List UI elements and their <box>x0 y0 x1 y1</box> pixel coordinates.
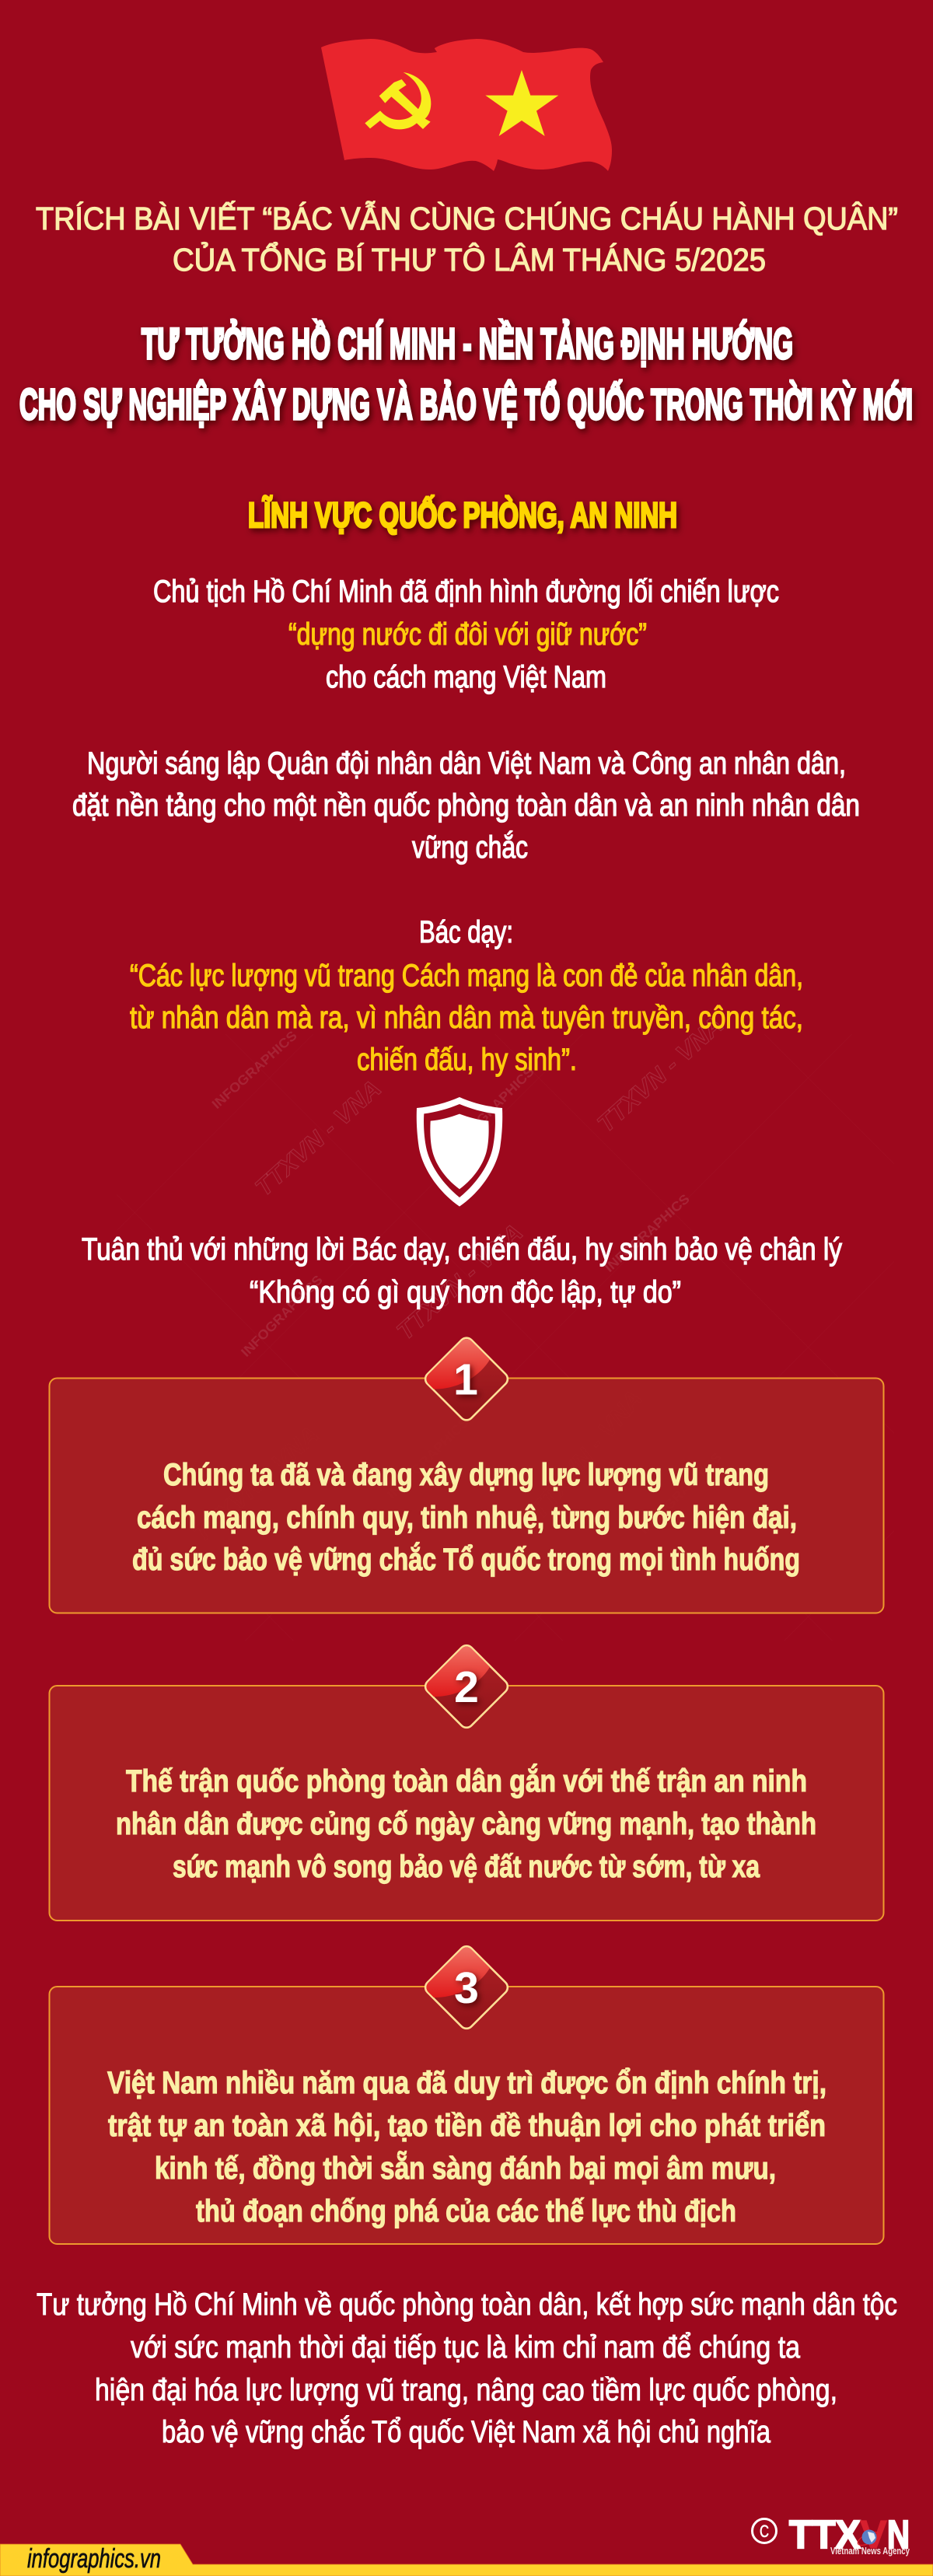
watermarks: TTXVN - VNA <box>525 1385 648 1524</box>
panel text 2: Thế trận quốc phòng toàn dân gắn với thế trận an ninh <box>126 1763 807 1798</box>
badge 2: 2 <box>454 1662 479 1712</box>
badge 1 <box>412 1325 511 1423</box>
title <box>19 319 913 428</box>
footer site name: infographics.vn <box>27 2544 161 2574</box>
text block: quote: Bác dạy: <box>419 915 513 949</box>
watermarks: TTXVN - VNA <box>187 1421 324 1547</box>
watermarks: INFOGRAPHICS <box>384 1414 472 1502</box>
footer band <box>0 2544 933 2576</box>
watermarks: TTXVN - VNA <box>592 1011 729 1138</box>
text block: strategic line: cho cách mạng Việt Nam <box>326 660 606 694</box>
panel text 3: kinh tế, đồng thời sẵn sàng đánh bại mọi âm mưu, <box>155 2150 776 2186</box>
text block: quote <box>130 915 803 1077</box>
watermarks: INFOGRAPHICS <box>449 1064 537 1152</box>
subtitle <box>36 201 898 278</box>
icon: shield <box>417 1097 502 1207</box>
text block: quote: chiến đấu, hy sinh”. <box>357 1043 577 1077</box>
panel text 3: thủ đoạn chống phá của các thế lực thù địch <box>196 2194 736 2228</box>
panel: point 2 <box>50 1632 883 1921</box>
badge 2 <box>412 1632 511 1731</box>
watermarks: INFOGRAPHICS <box>637 1449 725 1537</box>
subtitle: CỦA TỔNG BÍ THƯ TÔ LÂM THÁNG 5/2025 <box>173 241 766 278</box>
text block: founder <box>72 746 860 865</box>
watermarks: INFOGRAPHICS <box>238 1272 326 1360</box>
text block: strategic line: “dựng nước đi đôi với giữ nước” <box>288 617 647 652</box>
text block: quote: từ nhân dân mà ra, vì nhân dân mà tuyên truyền, công tác, <box>130 1001 803 1035</box>
text block: conclusion: bảo vệ vững chắc Tổ quốc Việt Nam xã hội chủ nghĩa <box>162 2414 771 2449</box>
panel text 2 <box>116 1763 816 1884</box>
copyright mark <box>753 2519 776 2543</box>
icon: hammer and sickle <box>365 72 431 129</box>
text block: conclusion: với sức mạnh thời đại tiếp tục là kim chỉ nam để chúng ta <box>131 2330 801 2365</box>
watermarks: INFOGRAPHICS <box>209 1028 300 1112</box>
panel: point 3 <box>50 1933 883 2244</box>
logo: TTXVN: TTX <box>789 2512 861 2557</box>
icon: party and national flag <box>321 39 612 171</box>
text block: oath <box>82 1232 842 1309</box>
panel text 1: cách mạng, chính quy, tinh nhuệ, từng bước hiện đại, <box>137 1501 797 1535</box>
text block: founder: vững chắc <box>412 830 528 865</box>
logo: TTXVN: V <box>860 2512 887 2557</box>
logo: TTXVN <box>753 2512 910 2557</box>
panel: point 1 <box>50 1325 883 1613</box>
section heading: LĨNH VỰC QUỐC PHÒNG, AN NINH <box>248 495 677 535</box>
panel text 3 <box>107 2066 826 2228</box>
panel text 1: Chúng ta đã và đang xây dựng lực lượng vũ trang <box>163 1458 769 1492</box>
copyright mark: C <box>760 2522 769 2541</box>
logo: TTXVN: N <box>887 2512 910 2557</box>
watermarks: TTXVN - VNA <box>250 1075 386 1201</box>
text block: strategic line: Chủ tịch Hồ Chí Minh đã định hình đường lối chiến lược <box>153 575 779 609</box>
panel text 2: sức mạnh vô song bảo vệ đất nước từ sớm, từ xa <box>173 1850 760 1884</box>
watermarks: INFOGRAPHICS <box>602 1191 693 1275</box>
badge 1: 1 <box>453 1354 478 1404</box>
panel text 1 <box>132 1458 800 1577</box>
icon: gold star <box>485 70 558 136</box>
text block: conclusion <box>37 2288 897 2449</box>
text block: strategic line <box>153 575 779 694</box>
badge 3 <box>412 1933 511 2032</box>
panel text 3: trật tự an toàn xã hội, tạo tiền đề thuận lợi cho phát triển <box>108 2109 826 2143</box>
badge 3: 3 <box>454 1963 479 2013</box>
text block: oath: “Không có gì quý hơn độc lập, tự do” <box>250 1275 681 1309</box>
watermarks: TTXVN - VNA <box>391 1218 528 1345</box>
watermarks <box>117 1011 894 1641</box>
logo: TTXVN: Vietnam News Agency <box>830 2546 910 2557</box>
